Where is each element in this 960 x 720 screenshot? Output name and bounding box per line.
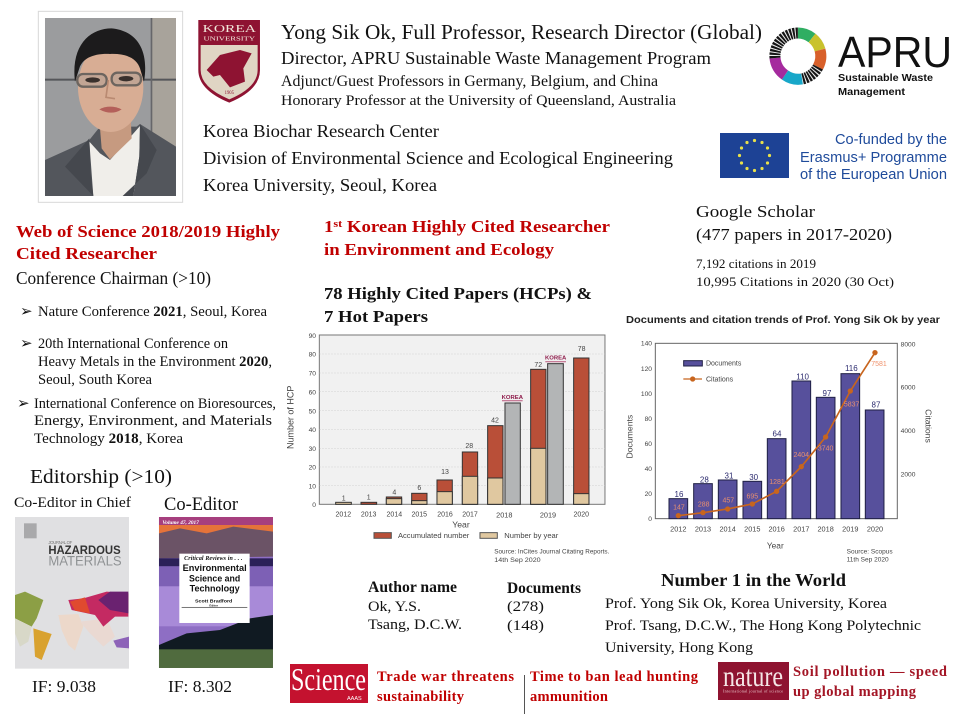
Google Scholar text: Google Scholar [696, 202, 815, 221]
author ranking table: (148) [507, 618, 544, 634]
Korean Highly Cited Researcher heading: 7 Hot Papers [324, 307, 428, 326]
HCP bar chart [286, 333, 610, 564]
second Science article title: Time to ban lead hunting [530, 669, 699, 685]
documents and citations chart: 30 [749, 473, 759, 482]
editorship labels [14, 467, 239, 515]
documents and citations chart: 3740 [818, 446, 834, 453]
impact factors: IF: 9.038 [32, 677, 96, 696]
conference list: Seoul, South Korea [38, 372, 153, 388]
documents and citations chart: 5837 [844, 401, 860, 408]
Number 1 in the World text: Number 1 in the World [661, 570, 846, 590]
HCP bar chart: 1 [367, 495, 371, 502]
documents and citations chart: 97 [823, 389, 832, 398]
Nature logo: International journal of science [723, 688, 783, 694]
journal cover: Journal of Hazardous Materials: HAZARDOUS [48, 543, 121, 557]
impact factors: IF: 8.302 [168, 677, 232, 696]
HCP bar chart: 40 [309, 427, 316, 434]
HCP bar chart: Number of HCP [286, 386, 296, 449]
affiliation text: Korea University, Seoul, Korea [203, 175, 437, 195]
author ranking table: Ok, Y.S. [368, 599, 421, 615]
conference list: Technology 2018, Korea [34, 431, 184, 447]
HCP bar chart: 42 [491, 417, 499, 424]
affiliation text: Korea Biochar Research Center [203, 121, 439, 141]
conference list: ➢ [20, 334, 33, 352]
Google Scholar text: 7,192 citations in 2019 [696, 257, 816, 271]
documents and citations chart: 87 [872, 401, 881, 410]
documents and citations chart: 116 [845, 364, 858, 373]
HCP bar chart: 2019 [540, 511, 556, 520]
HCP bar chart: 60 [309, 389, 316, 396]
documents and citations chart: 20 [645, 491, 652, 498]
HCP bar chart: 2017 [462, 512, 478, 519]
journal cover: Journal of Hazardous Materials: MATERIALS [48, 552, 122, 568]
conference list [17, 302, 276, 447]
author ranking table [368, 579, 581, 634]
documents and citations chart: 2017 [793, 525, 809, 534]
Korea University crest [198, 20, 260, 103]
second Science article title [530, 669, 699, 705]
documents and citations chart: 2020 [867, 525, 883, 534]
HCP bar chart: Source: InCites Journal Citating Reports. [494, 550, 610, 556]
documents and citations chart: 100 [641, 391, 652, 398]
documents and citations chart: 11th Sep 2020 [847, 557, 889, 564]
second Science article title: ammunition [530, 689, 608, 705]
documents and citations chart: 140 [641, 341, 652, 348]
documents and citations chart: 2019 [842, 525, 858, 534]
documents and citations chart: 16 [675, 490, 684, 499]
HCP bar chart: Number by year [504, 533, 559, 540]
conference list: 20th International Conference on [38, 336, 229, 352]
documents and citations chart: 8000 [901, 342, 916, 349]
journal cover: Critical Reviews in Environmental Science and Technology: Science and [189, 573, 241, 583]
HCP bar chart: 4 [392, 489, 396, 496]
journal cover: Journal of Hazardous Materials [15, 517, 129, 669]
documents and citations chart: 40 [645, 466, 652, 473]
HCP bar chart: 2018 [496, 511, 512, 520]
Korean Highly Cited Researcher heading: 1 [324, 217, 332, 236]
Google Scholar text [696, 202, 894, 289]
HCP bar chart: 2014 [387, 512, 402, 519]
author ranking table: Documents [507, 580, 581, 597]
Korea University crest: KOREA [203, 24, 257, 35]
author ranking table: Tsang, D.C.W. [368, 617, 462, 633]
documents and citations chart: 60 [645, 441, 652, 448]
documents and citations chart: Citations [706, 377, 734, 384]
documents and citations chart: 4000 [901, 428, 916, 435]
documents and citations chart: Documents [706, 361, 742, 368]
header text: name and titles: Adjunct/Guest Professors in Germany, Belgium, and China [281, 73, 658, 90]
conference list: International Conference on Bioresources, [34, 396, 276, 412]
documents and citations chart: Year [767, 540, 784, 550]
APRU logo [775, 29, 952, 98]
Nature logo [718, 660, 789, 700]
Science article title [377, 669, 514, 705]
Korean Highly Cited Researcher heading: Korean Highly Cited Researcher [342, 217, 610, 236]
conference list: ➢ [17, 394, 30, 412]
Highly Cited heading and conference chairman: Conference Chairman (>10) [16, 268, 211, 289]
HCP bar chart: 30 [309, 446, 316, 453]
HCP bar chart: 80 [309, 352, 316, 359]
EU Erasmus+ co-funding logo: Co-funded by the [835, 132, 947, 148]
HCP bar chart: 90 [309, 333, 316, 340]
author ranking table: (278) [507, 599, 544, 615]
EU Erasmus+ co-funding logo: Erasmus+ Programme [800, 150, 947, 166]
impact factors [32, 677, 232, 696]
Korean Highly Cited Researcher heading: st [333, 218, 343, 230]
documents and citations chart: 2013 [695, 525, 711, 534]
HCP bar chart: 10 [309, 483, 316, 490]
documents and citations chart: 1281 [769, 479, 785, 486]
EU Erasmus+ co-funding logo [720, 132, 947, 183]
Highly Cited heading and conference chairman: Cited Researcher [16, 244, 157, 263]
documents and citations chart [625, 315, 940, 564]
header text: name and titles: Director, APRU Sustainable Waste Management Program [281, 48, 711, 68]
affiliation text: Division of Environmental Science and Ecological Engineering [203, 148, 673, 168]
documents and citations chart: 2015 [744, 525, 760, 534]
HCP bar chart: 28 [465, 443, 473, 450]
Nature article title: up global mapping [793, 684, 917, 700]
Highly Cited heading and conference chairman: Web of Science 2018/2019 Highly [16, 222, 281, 241]
documents and citations chart: 2404 [794, 452, 809, 459]
documents and citations chart: 288 [698, 502, 710, 509]
Google Scholar text: (477 papers in 2017-2020) [696, 225, 892, 244]
Science article title: sustainability [377, 689, 465, 705]
journal cover: Critical Reviews in Environmental Science and Technology: Volume 47, 2017 [162, 520, 199, 526]
HCP bar chart: 1 [342, 495, 346, 502]
documents and citations chart: Documents [625, 414, 635, 459]
documents and citations chart: 2012 [670, 525, 686, 534]
journal cover: Critical Reviews in Environmental Science and Technology: Environmental [183, 563, 247, 573]
HCP bar chart: 2020 [574, 512, 589, 519]
APRU logo: Sustainable Waste [838, 72, 933, 84]
author ranking table: Author name [368, 579, 457, 596]
journal cover: Journal of Hazardous Materials: JOURNAL OF [48, 540, 73, 545]
Korean Highly Cited Researcher heading: 78 Highly Cited Papers (HCPs) & [324, 284, 592, 303]
journal cover: Critical Reviews in Environmental Science and Technology: Technology [190, 584, 240, 594]
conference list: ➢ [20, 302, 33, 320]
documents and citations chart: 80 [645, 416, 652, 423]
HCP bar chart: 72 [534, 362, 542, 369]
Number 1 in the World text: Prof. Yong Sik Ok, Korea University, Korea [605, 596, 887, 612]
Science logo: Science [291, 661, 366, 697]
Science logo [290, 661, 368, 703]
documents and citations chart: 457 [722, 498, 734, 505]
Science logo: AAAS [347, 696, 362, 702]
documents and citations chart: 0 [648, 516, 652, 523]
HCP bar chart: 2013 [361, 512, 377, 519]
HCP bar chart: 20 [309, 465, 316, 472]
conference list: Energy, Environment, and Materials [34, 413, 272, 429]
documents and citations chart: 2018 [817, 525, 834, 534]
EU Erasmus+ co-funding logo: of the European Union [800, 167, 947, 183]
HCP bar chart: Year [452, 519, 470, 529]
journal cover: Critical Reviews in Environmental Science and Technology: Scott Bradford [195, 599, 232, 605]
documents and citations chart: 2014 [719, 525, 736, 534]
portrait photo [38, 11, 183, 202]
editorship labels: Co-Editor [164, 494, 239, 515]
header text: name and titles [281, 20, 762, 109]
HCP bar chart: KOREA [545, 356, 566, 362]
documents and citations chart: 28 [700, 476, 709, 485]
Nature logo: nature [723, 660, 783, 693]
APRU logo: Management [838, 86, 906, 98]
APRU logo: APRU [838, 29, 952, 77]
documents and citations chart: 695 [746, 494, 758, 501]
Google Scholar text: 10,995 Citations in 2020 (30 Oct) [696, 275, 894, 289]
documents and citations chart: Source: Scopus [847, 549, 893, 556]
Korea University crest: UNIVERSITY [203, 37, 256, 43]
documents and citations chart: 7581 [871, 361, 887, 368]
journal cover: Critical Reviews in Environmental Science and Technology [159, 517, 273, 668]
documents and citations chart: 64 [773, 429, 782, 438]
journal cover: Critical Reviews in Environmental Science and Technology: Critical Reviews in . . . [184, 556, 243, 562]
HCP bar chart: 78 [578, 346, 586, 353]
editorship labels: Co-Editor in Chief [14, 495, 131, 511]
conference list: Nature Conference 2021, Seoul, Korea [38, 304, 268, 320]
journal cover: Critical Reviews in Environmental Science and Technology: Editor [209, 604, 219, 608]
HCP bar chart: 70 [309, 371, 316, 378]
Number 1 in the World text: Prof. Tsang, D.C.W., The Hong Kong Polytechnic [605, 618, 921, 634]
Highly Cited heading and conference chairman [16, 222, 281, 289]
header text: name and titles: Yong Sik Ok, Full Professor, Research Director (Global) [281, 20, 762, 44]
Number 1 in the World text: University, Hong Kong [605, 640, 754, 656]
HCP bar chart: 2016 [437, 512, 453, 519]
Korean Highly Cited Researcher heading [324, 217, 610, 326]
Korean Highly Cited Researcher heading: in Environment and Ecology [324, 240, 555, 259]
HCP bar chart: 2015 [412, 512, 427, 519]
HCP bar chart: 6 [417, 485, 421, 492]
Science article title: Trade war threatens [377, 669, 514, 685]
HCP bar chart: 14th Sep 2020 [494, 557, 541, 564]
affiliation text [203, 121, 673, 195]
documents and citations chart: 110 [796, 372, 810, 381]
editorship labels: Editorship (>10) [30, 467, 172, 488]
HCP bar chart: 2012 [336, 512, 351, 519]
documents and citations chart: 2000 [901, 472, 916, 479]
documents and citations chart: 31 [725, 472, 734, 481]
documents and citations chart: Documents and citation trends of Prof. Yong Sik Ok by year [626, 315, 940, 326]
HCP bar chart: 50 [309, 408, 316, 415]
documents and citations chart: 6000 [901, 385, 916, 392]
Nature article title [793, 664, 947, 700]
Number 1 in the World text [605, 570, 921, 656]
header text: name and titles: Honorary Professor at the University of Queensland, Australia [281, 93, 676, 109]
HCP bar chart: 0 [312, 502, 316, 509]
Korea University crest: 1905 [225, 91, 235, 96]
documents and citations chart: Citations [924, 409, 934, 443]
documents and citations chart: 120 [641, 366, 652, 373]
Nature article title: Soil pollution — speed [793, 664, 947, 680]
documents and citations chart: 147 [673, 505, 685, 512]
conference list: Heavy Metals in the Environment 2020, [38, 354, 272, 370]
documents and citations chart: 2016 [768, 525, 785, 534]
HCP bar chart: 13 [441, 469, 449, 476]
HCP bar chart: Accumulated number [398, 533, 470, 540]
HCP bar chart: KOREA [502, 395, 523, 401]
